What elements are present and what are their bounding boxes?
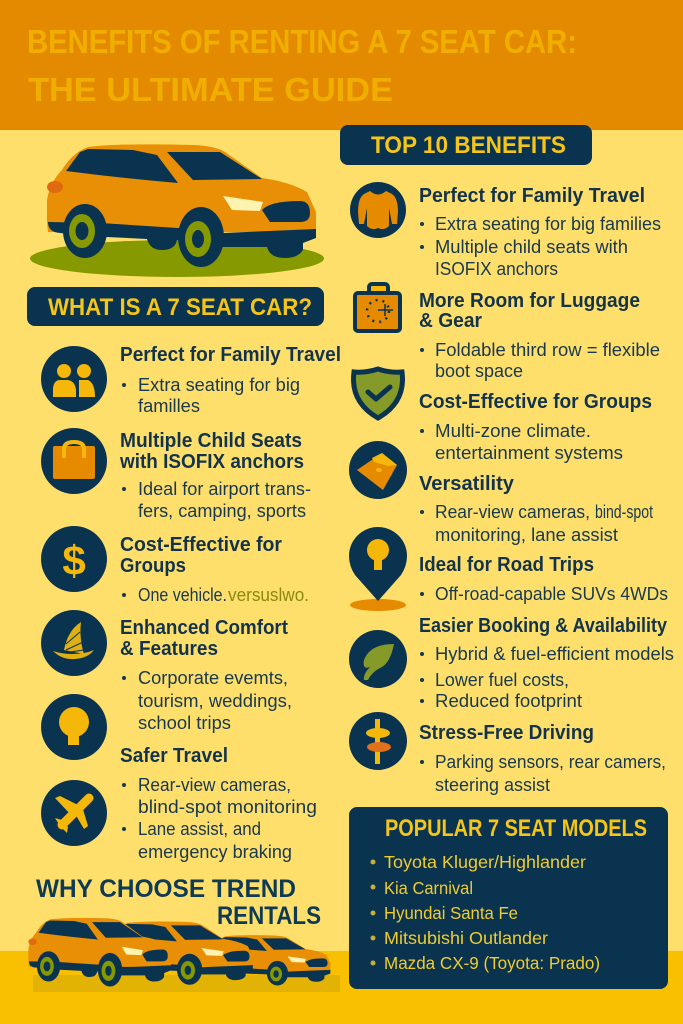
heading: top 10 benefits: TOP 10 BENEFITS (371, 132, 566, 159)
icon: signpost (349, 712, 407, 770)
icon: shield (354, 369, 402, 418)
text: comfort: tourism, weddings, (138, 691, 292, 711)
text: booking benefit (419, 614, 674, 711)
text: safer travel (120, 744, 317, 862)
icon: dollar: $ (62, 537, 86, 584)
text: cost benefit: Cost-Effective for Groups (419, 390, 652, 413)
text: luggage benefit (419, 289, 660, 381)
panel: popular 7 seat models: Kia Carnival (384, 878, 473, 898)
icon: sweater (350, 182, 406, 238)
text: perfect for family travel benefit: Extra seating for big families (435, 214, 661, 234)
icon: family (41, 346, 107, 412)
icon: bag (41, 428, 107, 494)
hero car illustration (30, 144, 324, 277)
text: safer travel: emergency braking (138, 842, 292, 862)
icon: airplane (41, 780, 107, 846)
text: child seats: Ideal for airport trans- (138, 479, 311, 499)
text: booking benefit: Lower fuel costs, (435, 670, 569, 690)
icon: light bulb (41, 694, 107, 760)
panel: popular 7 seat models: Hyundai Santa Fe (384, 903, 518, 923)
icon: map pin (349, 527, 407, 611)
title banner (0, 0, 683, 130)
panel: popular 7 seat models (349, 807, 668, 989)
text: versatility benefit: Rear-view cameras, (435, 502, 590, 522)
text: safer travel: Safer Travel (120, 744, 228, 767)
text: stress-free benefit: steering assist (435, 775, 550, 795)
text: luggage benefit: Foldable third row = flexible (435, 340, 660, 360)
text: child seats (119, 429, 311, 521)
text: cost effective: One vehicle. (138, 585, 227, 605)
text: versatility benefit: monitoring, lane assist (435, 525, 618, 545)
text: booking benefit: Reduced footprint (435, 691, 582, 711)
text: child seats: with ISOFIX anchors (119, 450, 304, 473)
text: perfect for family travel benefit (419, 184, 661, 279)
text: perfect for family travel benefit: ISOFIX anchors (435, 259, 558, 279)
text: perfect for family travel (120, 343, 341, 416)
text: stress-free benefit: Parking sensors, rear camers, (435, 752, 666, 772)
text: cost effective (120, 533, 309, 605)
heading: what is a 7 seat car (27, 287, 324, 326)
panel: popular 7 seat models: Mazda CX-9 (Toyota: Prado) (384, 953, 600, 973)
icon: luggage (355, 284, 400, 331)
icon: leaf (349, 630, 407, 688)
text: safer travel: Rear-view cameras, (138, 775, 291, 795)
heading: top 10 benefits (340, 125, 592, 165)
panel: popular 7 seat models: Mitsubishi Outlander (384, 928, 548, 948)
text: comfort: & Features (120, 637, 218, 660)
text: road trips benefit: Ideal for Road Trips (419, 553, 594, 576)
text: stress-free benefit (419, 721, 666, 795)
text: booking benefit: Hybrid & fuel-efficient models (435, 644, 674, 664)
text: comfort (120, 616, 292, 733)
text: child seats: fers, camping, sports (138, 501, 306, 521)
text: perfect for family travel benefit: Multiple child seats with (435, 237, 628, 257)
text: perfect for family travel benefit: Perfect for Family Travel (419, 184, 645, 207)
text: comfort: Enhanced Comfort (120, 616, 288, 639)
icon: ticket wedge (349, 441, 407, 499)
text: cost effective: versuslwo. (228, 585, 309, 605)
text: cost effective: Groups (120, 554, 186, 577)
text: versatility benefit: bind-spot (595, 502, 653, 522)
text: luggage benefit: & Gear (419, 309, 482, 332)
heading: why choose trend rentals: WHY CHOOSE TREND (36, 875, 296, 903)
text: perfect for family travel: Extra seating for big (138, 375, 300, 395)
panel: popular 7 seat models: Toyota Kluger/Highlander (384, 852, 586, 872)
heading: why choose trend rentals (36, 875, 321, 930)
illustration: three rental cars (28, 918, 340, 992)
heading: what is a 7 seat car: WHAT IS A 7 SEAT CAR? (48, 294, 312, 321)
text: stress-free benefit: Stress-Free Driving (419, 721, 594, 744)
text: cost benefit: Multi-zone climate. (435, 421, 591, 441)
text: comfort: Corporate evemts, (138, 668, 288, 688)
text: cost benefit: entertainment systems (435, 443, 623, 463)
text: road trips benefit (419, 553, 668, 604)
text: versatility benefit (419, 472, 653, 545)
icon: sail hat (41, 610, 107, 676)
text: comfort: school trips (138, 713, 231, 733)
text: luggage benefit: More Room for Luggage (419, 289, 640, 312)
text: safer travel: Lane assist, and (138, 819, 261, 839)
text: luggage benefit: boot space (435, 361, 523, 381)
title banner: THE ULTIMATE GUIDE (28, 71, 393, 108)
text: safer travel: blind-spot monitoring (138, 797, 317, 817)
text: road trips benefit: Off-road-capable SUVs 4WDs (435, 584, 668, 604)
text: cost effective: Cost-Effective for (120, 533, 282, 556)
title banner: BENEFITS OF RENTING A 7 SEAT CAR: (27, 23, 577, 60)
text: child seats: Multiple Child Seats (120, 429, 302, 452)
text: cost benefit (419, 390, 652, 463)
heading: why choose trend rentals: RENTALS (217, 902, 321, 930)
icon: dollar (41, 526, 107, 592)
text: versatility benefit: Versatility (419, 472, 515, 495)
text: perfect for family travel: Perfect for Family Travel (120, 343, 341, 366)
text: perfect for family travel: familles (138, 396, 200, 416)
